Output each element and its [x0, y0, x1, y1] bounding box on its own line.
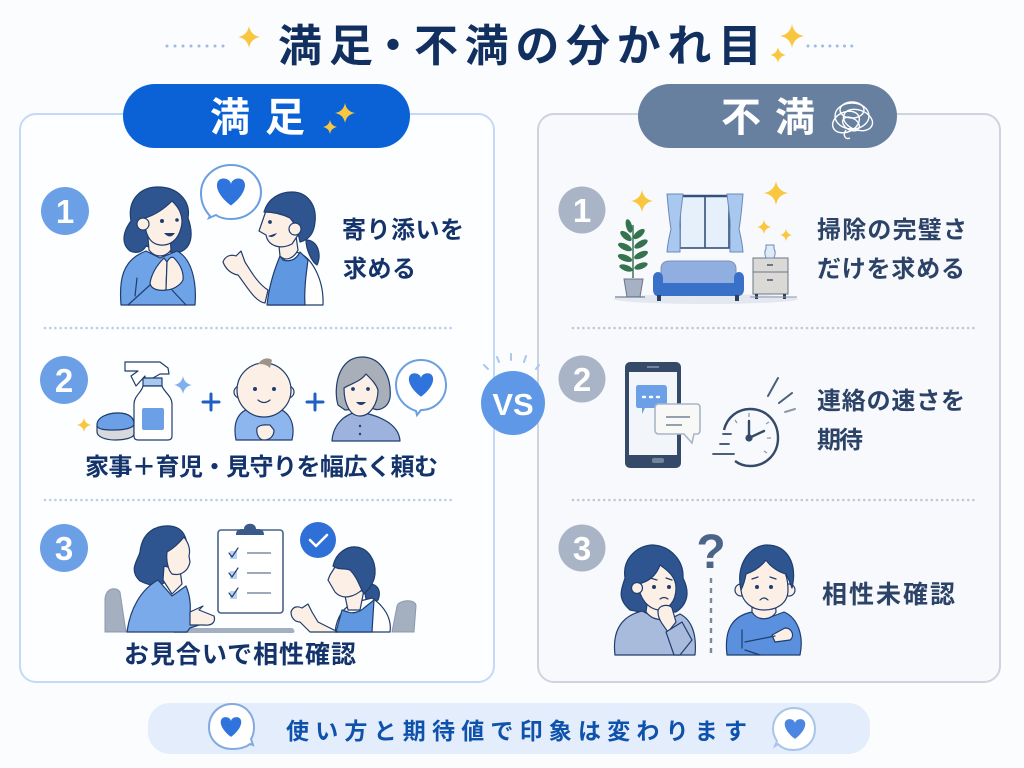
text: compatibility unconfirmed: 相性未確認 [822, 581, 955, 609]
text: ask for companionship [342, 217, 464, 283]
heading pill: satisfied [123, 84, 410, 148]
client [124, 187, 191, 252]
speech bubble with heart [201, 165, 261, 219]
plus signs [203, 394, 323, 410]
icon: heart bubble right [773, 708, 815, 750]
heading pill: dissatisfied [638, 84, 897, 148]
VS badge: VS [492, 387, 534, 422]
clock [724, 409, 778, 466]
speed lines [713, 434, 734, 454]
illustration: unsure pair [614, 526, 801, 655]
sofa [661, 261, 736, 290]
nightstand [753, 258, 788, 272]
text: only perfect cleaning: だけを求める [817, 256, 965, 283]
worried woman [621, 545, 687, 612]
text: ask for companionship: 求める [343, 256, 416, 283]
title text: ・ [371, 22, 415, 71]
illustration: meeting with checklist [105, 522, 416, 632]
number badges: dissatisfied: 3 [573, 530, 591, 567]
VS badge [481, 354, 545, 435]
panel: dissatisfied [538, 114, 1000, 682]
text: expecting fast contact [817, 388, 965, 454]
text: match check at interview: お見合いで相性確認 [124, 641, 356, 669]
icon: heart bubble left [209, 704, 254, 749]
text: expecting fast contact: 期待 [817, 427, 863, 454]
text: only perfect cleaning [817, 217, 967, 283]
phone [625, 362, 681, 468]
check badge [300, 522, 336, 558]
illustration: perfectly clean room [614, 181, 798, 304]
number badges: satisfied: 1 [56, 193, 74, 230]
illustration: client and helper talking [120, 165, 323, 305]
footer banner [148, 703, 870, 754]
helper [306, 240, 319, 265]
worried man [726, 612, 801, 655]
illustration: phone and clock [625, 362, 795, 468]
client [134, 526, 187, 585]
number badges: dissatisfied [558, 186, 606, 572]
dividers [45, 328, 974, 500]
panel: satisfied [20, 114, 494, 682]
number badges: satisfied: 2 [55, 362, 73, 399]
icon: elderly woman [332, 357, 446, 441]
text: ask for companionship: 寄り添いを [342, 217, 464, 244]
number badges: satisfied: 3 [55, 530, 73, 567]
rays [484, 354, 539, 369]
illustration: housework, childcare and elder care [77, 357, 446, 441]
title text: 満足 [278, 22, 373, 71]
footer banner: 使い方と期待値で印象は変わります [286, 718, 747, 744]
title [167, 22, 859, 71]
message bubble [655, 404, 700, 443]
heading pill: dissatisfied: 不満 [721, 96, 815, 140]
text: expecting fast contact: 連絡の速さを [817, 388, 965, 415]
heading pill: satisfied: 満足 [210, 96, 305, 140]
icon: baby [234, 358, 294, 440]
number badges: satisfied [40, 187, 89, 572]
helper [365, 584, 379, 604]
number badges: dissatisfied: 2 [573, 361, 591, 398]
text: only perfect cleaning: 掃除の完璧さ [817, 217, 967, 244]
number badges: dissatisfied: 1 [573, 192, 591, 229]
clipboard [218, 524, 283, 613]
icon: spray and sponge [77, 362, 192, 440]
text: wide requests: 家事＋育児・見守りを幅広く頼む [85, 454, 438, 481]
question mark: ? [696, 526, 726, 579]
plant [632, 225, 634, 278]
chairs and table [105, 589, 126, 632]
title text: 不満の分かれ目 [414, 22, 762, 71]
floor [614, 294, 798, 304]
icon: scribble [829, 102, 876, 139]
window [680, 196, 729, 248]
